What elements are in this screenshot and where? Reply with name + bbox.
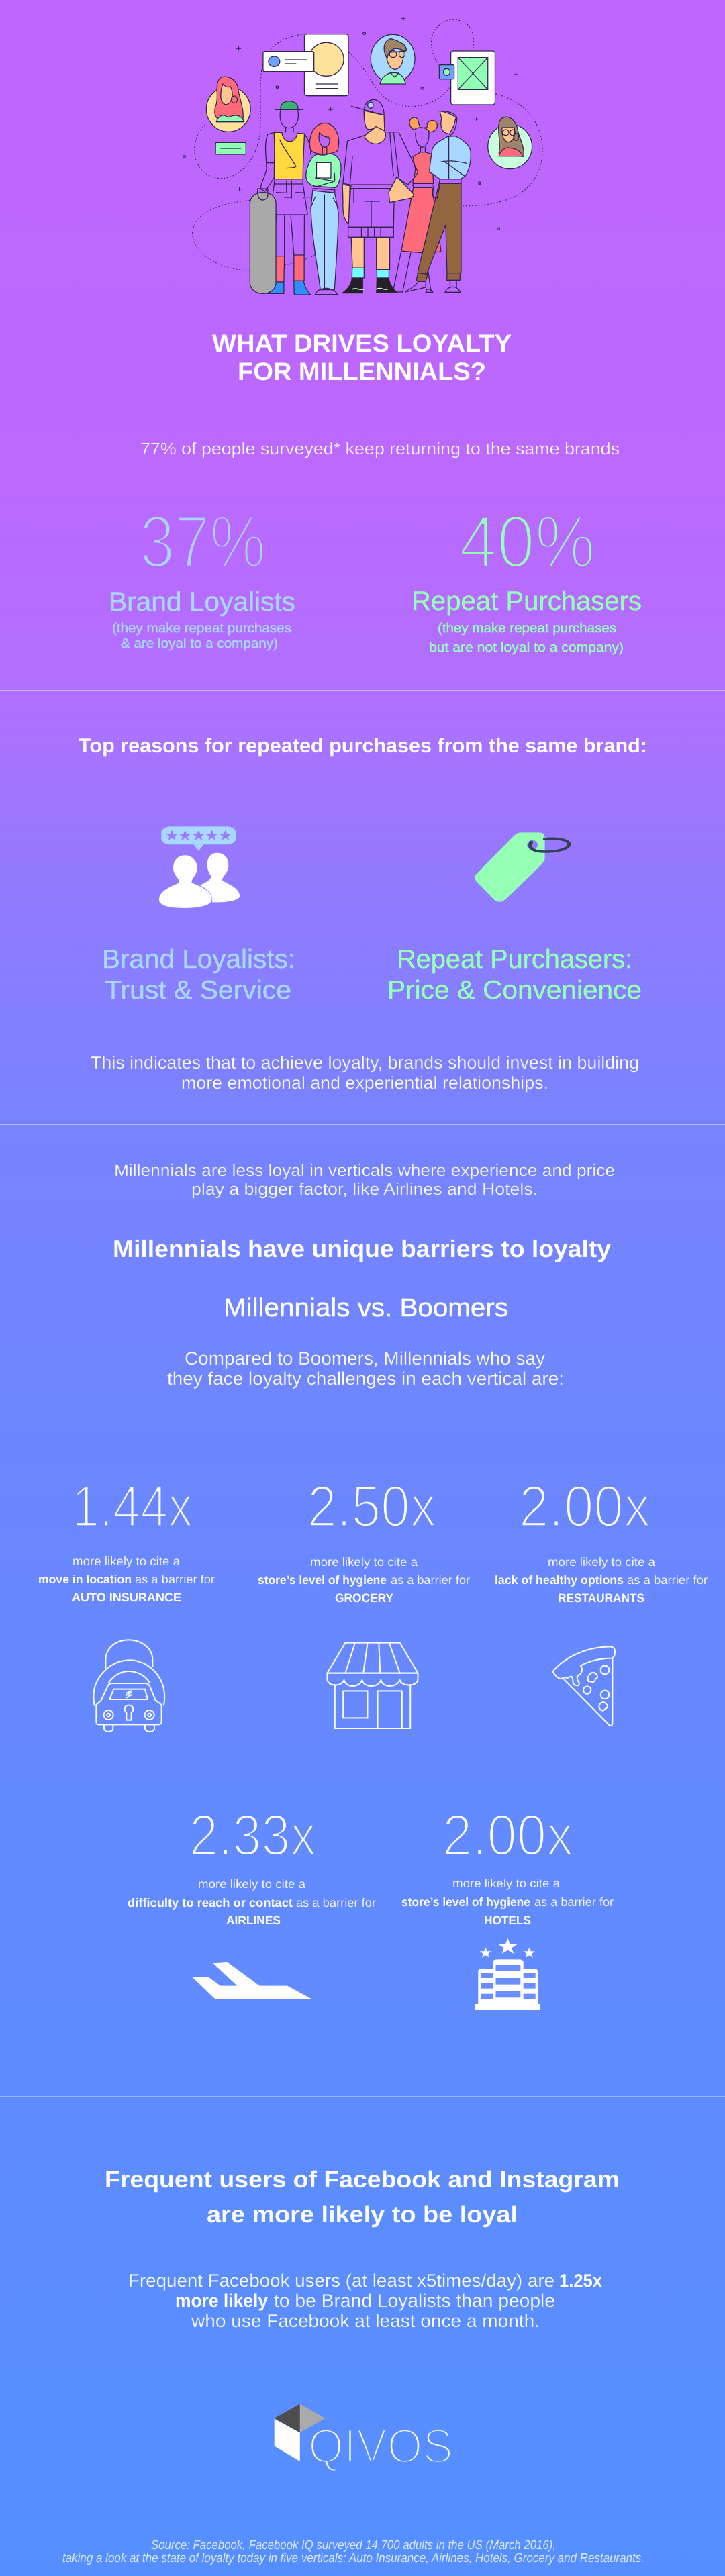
avatar: red haired woman — [206, 77, 250, 132]
reason: brand loyalists — [102, 945, 295, 1005]
stat: brand loyalists 37%: (they make repeat purchases — [112, 621, 291, 636]
heading: frequent users: are more likely to be loyal — [207, 2201, 518, 2228]
stat: auto insurance 1.44x — [38, 1474, 215, 1604]
stat: auto insurance 1.44x: more likely to cite a — [72, 1554, 181, 1568]
text block: facebook users statistic: who use Facebook at least once a month. — [191, 2311, 540, 2331]
text block: comparison intro: they face loyalty challenges in each vertical are: — [167, 1369, 564, 1389]
stat: airlines 2.33x — [128, 1803, 376, 1927]
text block: loyalty takeaway — [91, 1052, 639, 1093]
reason: repeat purchasers — [387, 945, 642, 1005]
stat: restaurants 2.00x — [495, 1474, 708, 1605]
logo: QIVOS cube and wordmark: QIVOS — [308, 2420, 453, 2473]
stat: grocery 2.50x: GROCERY — [335, 1591, 393, 1605]
text block: verticals — [114, 1161, 615, 1199]
stat: grocery 2.50x: as a barrier for — [391, 1573, 470, 1587]
text block: facebook users statistic: Frequent Facebook users (at least x5times/day) are — [128, 2271, 554, 2291]
stat: grocery 2.50x — [258, 1474, 470, 1605]
source note — [62, 2538, 644, 2565]
icon: two people with star rating — [159, 826, 240, 908]
stat: hotels 2.00x: more likely to cite a — [452, 1877, 561, 1890]
text block: comparison intro — [167, 1348, 564, 1389]
stat: airlines 2.33x: 2.33x — [189, 1803, 316, 1868]
person with skateboard and yellow tank top — [250, 101, 311, 295]
stat: hotels 2.00x: 2.00x — [442, 1803, 573, 1868]
icon: car with keyhole — [93, 1640, 164, 1732]
stat: repeat purchasers 40%: 40% — [459, 501, 595, 583]
survey summary sentence: 77% of people surveyed* keep returning to the same brands — [140, 440, 620, 458]
text block: verticals: Millennials are less loyal in verticals where experience and price — [114, 1161, 615, 1180]
stat: airlines 2.33x: more likely to cite a — [198, 1877, 306, 1891]
title: FOR MILLENNIALS? — [238, 358, 486, 385]
icon: green price tag with ring — [475, 832, 569, 902]
text block: facebook users statistic: more likely — [175, 2291, 268, 2311]
reason: repeat purchasers: Price & Convenience — [387, 976, 642, 1005]
text block: facebook users statistic: 1.25x — [559, 2271, 602, 2291]
stat: repeat purchasers 40%: but are not loyal to a company) — [429, 640, 624, 655]
stat: brand loyalists 37% — [109, 501, 295, 651]
reason: brand loyalists: Trust & Service — [105, 976, 291, 1005]
icon: grocery storefront — [328, 1643, 418, 1728]
stat: airlines 2.33x: as a barrier for — [296, 1896, 376, 1910]
title — [212, 330, 512, 385]
logo: QIVOS cube and wordmark — [275, 2404, 453, 2473]
icon: airplane — [192, 1962, 313, 1999]
stat: brand loyalists 37%: & are loyal to a company) — [121, 636, 278, 651]
hero illustration: group of millennials with profile cards — [183, 17, 542, 295]
stat: repeat purchasers 40% — [412, 501, 642, 655]
stat: repeat purchasers 40%: (they make repeat purchases — [438, 621, 616, 636]
stat: hotels 2.00x: as a barrier for — [534, 1895, 614, 1909]
source note: taking a look at the state of loyalty today in five verticals: Auto Insurance, Airlines, Hotels, Grocery and Restaurants. — [62, 2551, 644, 2565]
stat: repeat purchasers 40%: Repeat Purchasers — [412, 587, 642, 616]
reason: brand loyalists: Brand Loyalists: — [102, 945, 295, 974]
man with blue shirt and brown trousers — [405, 111, 471, 292]
profile card with yellow circle — [263, 34, 348, 96]
stat: airlines 2.33x: AIRLINES — [226, 1914, 281, 1927]
stat: airlines 2.33x: difficulty to reach or contact — [128, 1896, 293, 1910]
stat: hotels 2.00x: store’s level of hygiene — [401, 1895, 530, 1909]
stat: brand loyalists 37%: 37% — [140, 501, 266, 583]
heading: unique barriers: Millennials have unique barriers to loyalty — [113, 1235, 611, 1262]
central man in purple cap and shorts — [342, 99, 418, 293]
stat: auto insurance 1.44x: 1.44x — [72, 1474, 193, 1539]
stat: brand loyalists 37%: Brand Loyalists — [109, 587, 295, 617]
text block: facebook users statistic — [128, 2271, 602, 2331]
text block: comparison intro: Compared to Boomers, Millennials who say — [185, 1348, 546, 1369]
stat: restaurants 2.00x: RESTAURANTS — [558, 1591, 644, 1605]
stat: grocery 2.50x: more likely to cite a — [310, 1555, 418, 1569]
heading: frequent users: Frequent users of Facebook and Instagram — [105, 2167, 620, 2193]
text block: loyalty takeaway: more emotional and experiential relationships. — [181, 1073, 548, 1093]
title: WHAT DRIVES LOYALTY — [212, 330, 512, 357]
stat: auto insurance 1.44x: move in location — [38, 1573, 132, 1586]
heading: top reasons: Top reasons for repeated purchases from the same brand: — [79, 735, 647, 757]
woman with red hair and green sweater — [306, 123, 341, 295]
icon: pizza slice — [553, 1646, 615, 1726]
avatar: man with glasses — [371, 34, 415, 84]
stat: restaurants 2.00x: as a barrier for — [627, 1573, 708, 1587]
source note: Source: Facebook, Facebook IQ surveyed 14,700 adults in the US (March 2016), — [151, 2538, 556, 2553]
stat: hotels 2.00x: HOTELS — [484, 1914, 531, 1927]
woman with orange hair buns and red dress — [393, 117, 441, 292]
stat: auto insurance 1.44x: as a barrier for — [135, 1573, 215, 1586]
text block: loyalty takeaway: This indicates that to achieve loyalty, brands should invest in building — [91, 1052, 639, 1073]
stat: restaurants 2.00x: more likely to cite a — [548, 1555, 656, 1569]
heading: frequent users — [105, 2167, 620, 2228]
image card with green placeholder — [439, 51, 495, 105]
green button — [215, 142, 246, 154]
heading: millennials vs boomers: Millennials vs. Boomers — [224, 1294, 508, 1322]
stat: grocery 2.50x: 2.50x — [307, 1474, 436, 1539]
text block: verticals: play a bigger factor, like Airlines and Hotels. — [191, 1180, 538, 1199]
stat: auto insurance 1.44x: AUTO INSURANCE — [72, 1591, 181, 1604]
reason: repeat purchasers: Repeat Purchasers: — [397, 945, 632, 974]
avatar: woman with glasses — [488, 117, 532, 169]
stat: grocery 2.50x: store’s level of hygiene — [258, 1573, 387, 1587]
text block: facebook users statistic: to be Brand Loyalists than people — [274, 2291, 555, 2311]
stat: restaurants 2.00x: lack of healthy options — [495, 1573, 624, 1587]
icon: hotel with three stars — [475, 1938, 540, 2010]
stat: hotels 2.00x — [401, 1803, 614, 1927]
stat: restaurants 2.00x: 2.00x — [519, 1474, 650, 1539]
